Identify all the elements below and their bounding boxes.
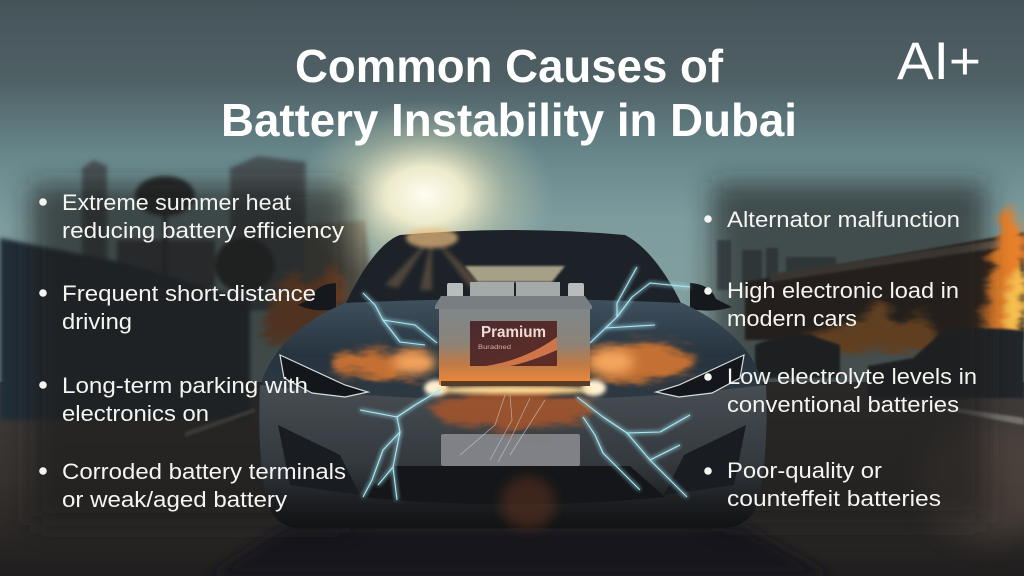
background: right road warm tint	[920, 420, 1024, 540]
battery	[435, 282, 592, 386]
background: road	[0, 382, 1024, 576]
lens flare	[501, 476, 555, 530]
battery: cell caps	[470, 282, 560, 299]
background: right bridge	[745, 232, 1024, 340]
battery: case	[439, 309, 590, 385]
car: rear window	[465, 266, 565, 282]
lightning bolts	[360, 267, 690, 500]
bullet: short trips: Frequent short-distance	[62, 281, 316, 306]
bullet: counterfeit: counteffeit batteries	[727, 486, 941, 511]
car: right mirror	[690, 283, 732, 311]
background: left skyline and palms	[82, 156, 375, 320]
bullet: parking: Long-term parking with	[62, 373, 308, 398]
bullet: electronic load: High electronic load in	[727, 278, 959, 303]
bullet: electrolyte: conventional batteries	[727, 392, 959, 417]
right dark text panel	[712, 183, 987, 523]
background: sun glare	[295, 100, 555, 290]
bullet: short trips: driving	[62, 309, 132, 334]
car: windshield sunburst	[385, 228, 482, 290]
bullet: heat: Extreme summer heat	[62, 190, 291, 215]
bullet: corrosion: Corroded battery terminals	[62, 459, 346, 484]
background: right flames	[790, 205, 1024, 352]
title line 1: Common Causes of	[295, 40, 724, 92]
bullet: alternator: Alternator malfunction	[727, 207, 960, 232]
background: road shadow under car	[210, 525, 830, 576]
background: left overpass	[0, 238, 250, 420]
bullet: heat	[39, 190, 344, 243]
bullet: counterfeit: Poor-quality or	[727, 458, 882, 483]
bullet: electronic load: modern cars	[727, 306, 857, 331]
bullet: electronic load	[704, 278, 959, 331]
bullet: corrosion	[39, 459, 346, 512]
left dark text panel	[30, 185, 350, 525]
bullet: heat: reducing battery efficiency	[62, 218, 344, 243]
background: bridge rail	[770, 236, 1024, 282]
background: left flames	[262, 262, 345, 345]
car: grille	[360, 466, 665, 504]
background: sky	[0, 0, 1024, 400]
car: left mirror	[298, 283, 336, 310]
battery: lid	[435, 296, 592, 309]
battery: swoosh	[486, 337, 557, 366]
fine white cracks on plate	[460, 395, 545, 462]
bullet: short trips	[39, 281, 316, 334]
bullet: electrolyte	[704, 364, 977, 417]
left list	[39, 190, 346, 512]
title line 2: Battery Instability in Dubai	[221, 94, 797, 146]
bullet: counterfeit	[704, 458, 941, 511]
bullet: parking: electronics on	[62, 401, 209, 426]
car: number plate	[441, 434, 580, 466]
bullet: corrosion: or weak/aged battery	[62, 487, 287, 512]
title	[221, 40, 797, 146]
battery: label subtitle: Buradned	[478, 344, 511, 351]
battery: brand name: Pramium	[481, 324, 546, 341]
car: lower bumper	[259, 385, 767, 528]
car: left headlight	[280, 355, 368, 397]
background: right road line	[935, 405, 1024, 425]
bullet: parking	[39, 373, 308, 426]
car: cabin and windshield	[345, 230, 682, 305]
car	[259, 228, 767, 528]
car: hood	[262, 299, 762, 440]
logo: AI+: AI+	[897, 32, 981, 91]
bullet: electrolyte: Low electrolyte levels in	[727, 364, 977, 389]
background: left road line	[185, 408, 255, 437]
battery: terminals	[447, 283, 584, 297]
car: right headlight	[656, 355, 744, 397]
battery: base rim	[441, 381, 590, 386]
car: right air intake	[664, 425, 746, 495]
background: right skyline	[717, 240, 836, 290]
right list	[704, 207, 977, 511]
sparks and fire around battery	[330, 342, 695, 430]
background: parked cars	[755, 328, 1024, 398]
car: left air intake	[278, 425, 360, 495]
battery: label	[470, 321, 557, 366]
